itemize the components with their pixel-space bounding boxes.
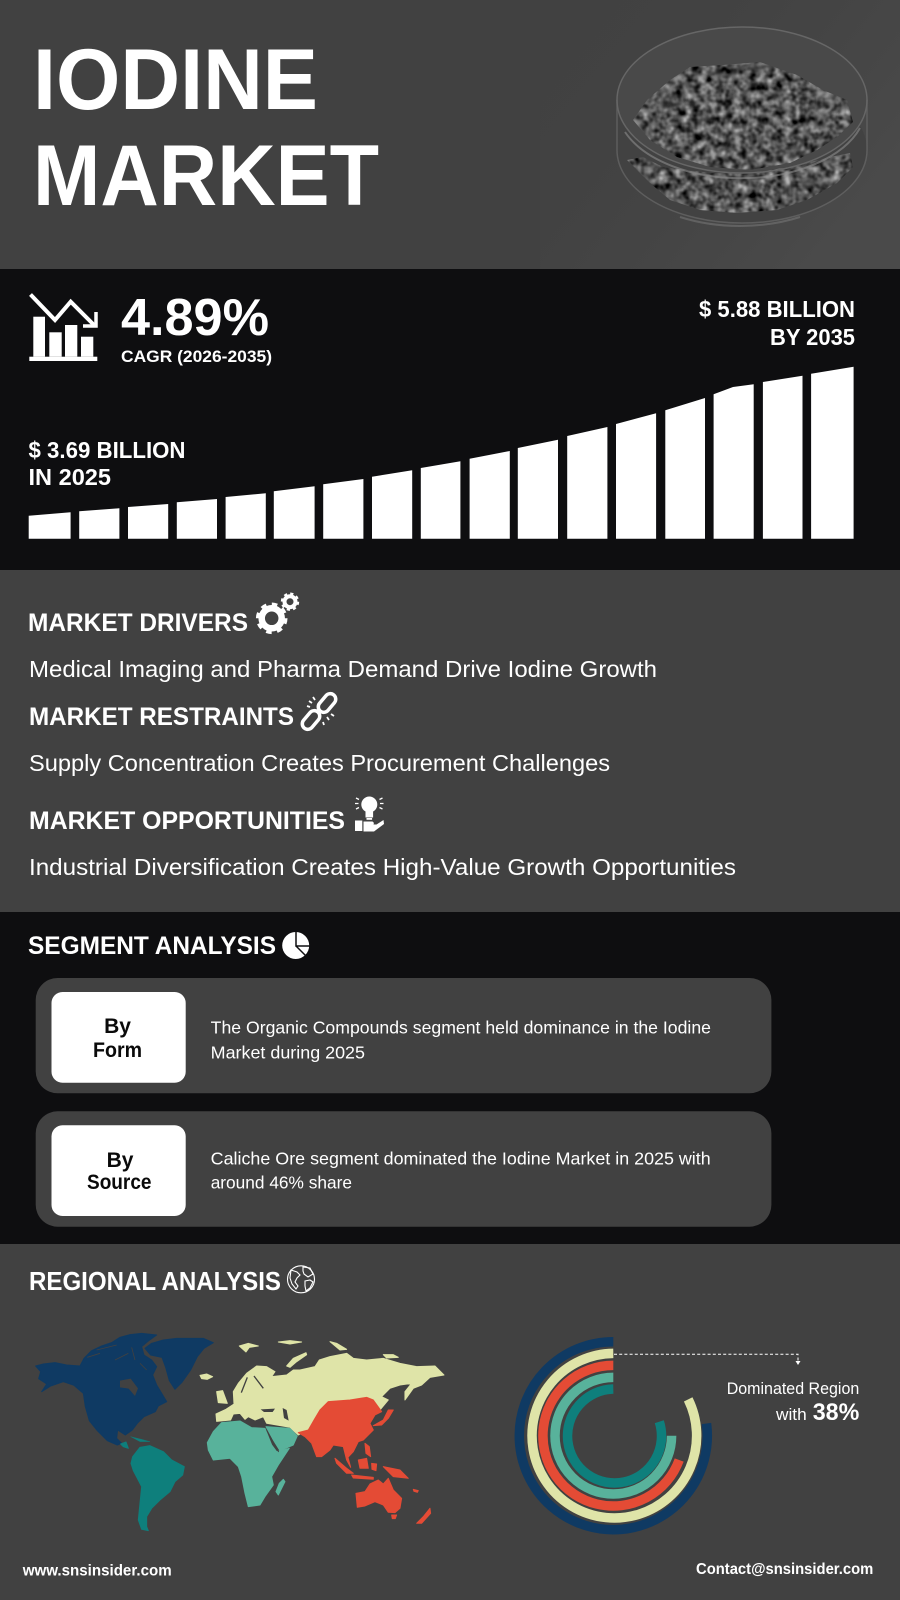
text: by form: Market during 2025 [211, 1042, 365, 1062]
label: by source: By [107, 1149, 134, 1172]
text: opportunities: Industrial Diversification Creates High-Value Growth Opportunities [29, 854, 736, 880]
bar chart: market growth [29, 367, 854, 539]
photo: petri dish of iodine crystals [617, 27, 867, 230]
panel: segment analysis [0, 912, 900, 1244]
icon: declining chart [29, 294, 97, 361]
heading: market restraints: MARKET RESTRAINTS [29, 703, 294, 731]
label: by source: Source [87, 1171, 152, 1194]
title: MARKET [33, 128, 379, 224]
title: IODINE [33, 32, 318, 128]
region: North America [36, 1333, 213, 1445]
region: South America [121, 1437, 184, 1531]
text: by source: Caliche Ore segment dominated the Iodine Market in 2025 with [211, 1148, 711, 1168]
text: by form: The Organic Compounds segment held dominance in the Iodine [211, 1017, 711, 1037]
label: by form [93, 1015, 142, 1062]
text: by form [211, 1017, 711, 1062]
panel: market dynamics [0, 570, 900, 912]
heading: market drivers: MARKET DRIVERS [28, 609, 248, 637]
callout: dominated region: Dominated Region [727, 1380, 859, 1398]
callout line [614, 1354, 800, 1365]
CAGR value: 4.89% [121, 289, 269, 347]
card: by source [36, 1111, 771, 1227]
footer: website: www.snsinsider.com [22, 1563, 172, 1580]
text: by source: around 46% share [211, 1173, 352, 1193]
icon: pie chart [282, 932, 310, 959]
icon: gears [258, 594, 298, 632]
heading: regional analysis: REGIONAL ANALYSIS [29, 1266, 281, 1296]
title [33, 32, 379, 224]
label: 2035 value: $ 5.88 BILLION [699, 296, 855, 322]
text: restraints: Supply Concentration Creates Procurement Challenges [29, 750, 610, 776]
callout: dominated region: with [775, 1406, 807, 1424]
label: 2025 value: $ 3.69 BILLION [28, 437, 186, 463]
icon: globe [288, 1266, 314, 1293]
panel: regional analysis [0, 1244, 900, 1600]
callout: dominated region [727, 1380, 859, 1426]
text: by source [211, 1148, 711, 1193]
text: drivers: Medical Imaging and Pharma Demand Drive Iodine Growth [29, 656, 657, 682]
panel: header [38, 26, 900, 269]
label: 2035 value: BY 2035 [770, 324, 855, 350]
region: Asia Pacific [298, 1397, 431, 1523]
region: Europe and North Asia [200, 1341, 444, 1435]
world map [36, 1333, 444, 1531]
chart: concentric donut [519, 1342, 707, 1530]
icon: bulb in hand [355, 796, 384, 832]
label: 2025 value [28, 437, 186, 490]
heading: market opportunities: MARKET OPPORTUNITIES [29, 807, 345, 835]
card: by form [36, 978, 771, 1093]
region: Middle East and Africa [207, 1421, 297, 1507]
label: by form: Form [93, 1039, 142, 1062]
icon: broken chain [300, 691, 338, 732]
label: 2035 value [699, 296, 855, 350]
label: by source [87, 1149, 152, 1194]
label: 2025 value: IN 2025 [28, 464, 111, 490]
label: by form: By [104, 1015, 131, 1038]
heading: segment analysis: SEGMENT ANALYSIS [28, 932, 276, 960]
footer: contact: Contact@snsinsider.com [696, 1561, 873, 1578]
panel: market size [0, 269, 900, 570]
CAGR label: CAGR (2026-2035) [121, 347, 272, 366]
callout: dominated region: 38% [813, 1399, 859, 1426]
